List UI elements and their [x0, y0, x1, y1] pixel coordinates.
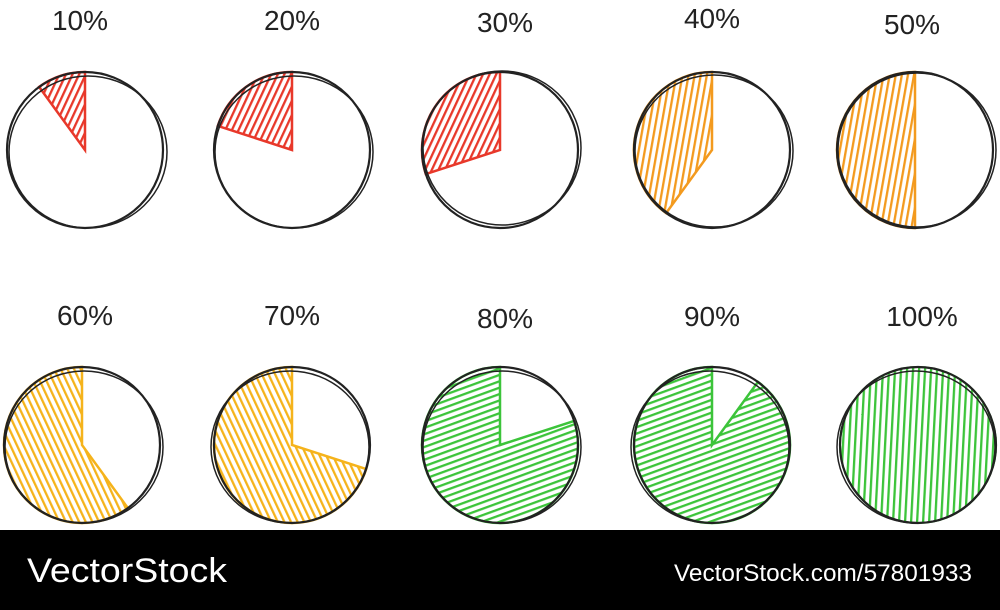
label: 30%: 30% — [477, 7, 533, 38]
footer bar — [0, 530, 1000, 610]
label: 100%: 100% — [886, 301, 958, 332]
label: 70%: 70% — [264, 300, 320, 331]
pie: 40% — [634, 72, 793, 228]
pie: 90% — [631, 367, 790, 523]
footer brand: VectorStock — [27, 552, 228, 590]
label: 60%: 60% — [57, 300, 113, 331]
pie: 50% — [837, 72, 996, 228]
pie: 10% — [7, 72, 167, 228]
label: 40%: 40% — [684, 3, 740, 34]
pie: 60% — [4, 367, 163, 523]
pie: 30% — [422, 71, 581, 228]
pie: 100% — [837, 367, 996, 523]
pie: 80% — [422, 367, 581, 523]
footer id: VectorStock.com/57801933 — [674, 560, 972, 587]
pie: 70% — [211, 367, 370, 523]
label: 20%: 20% — [264, 5, 320, 36]
label: 90%: 90% — [684, 301, 740, 332]
label: 80%: 80% — [477, 303, 533, 334]
pie: 20% — [214, 72, 373, 228]
label: 50%: 50% — [884, 9, 940, 40]
label: 10%: 10% — [52, 5, 108, 36]
